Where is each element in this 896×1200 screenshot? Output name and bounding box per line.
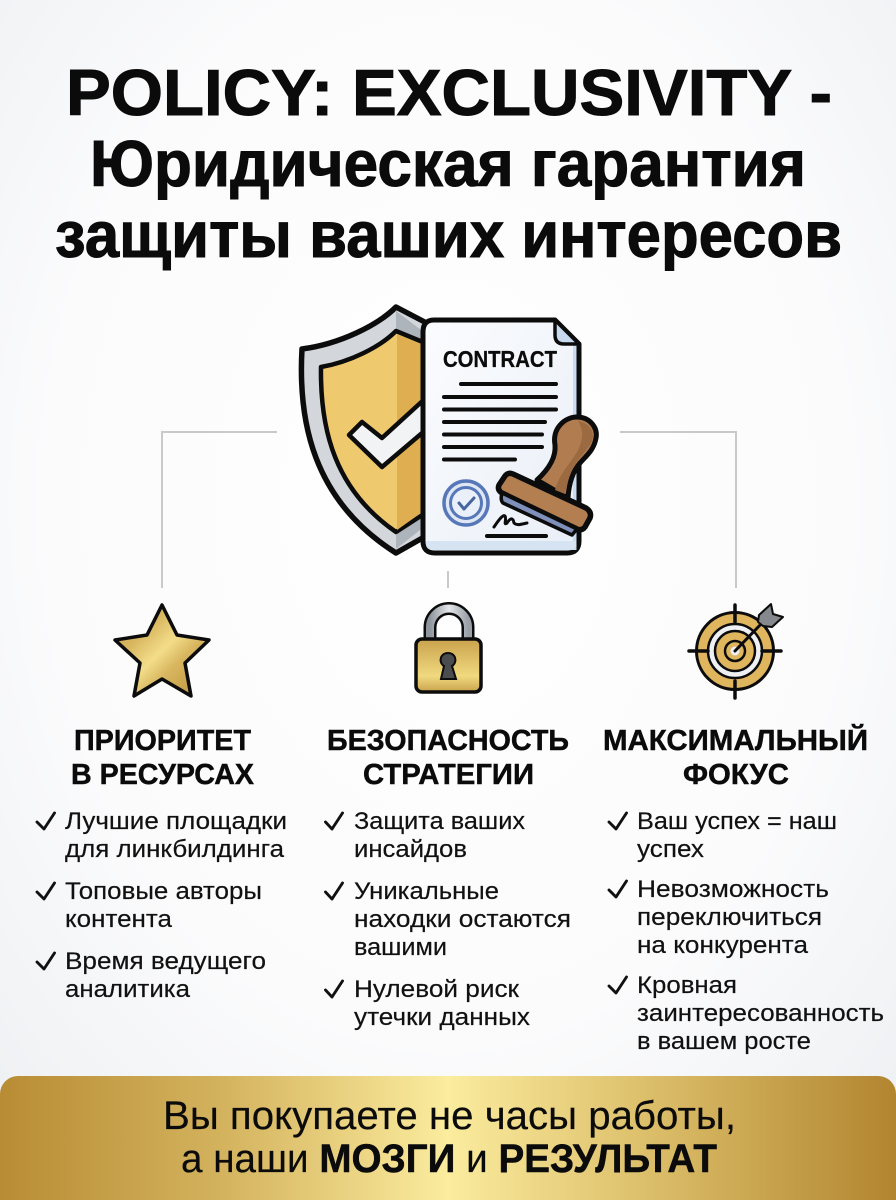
column: maximum focus [603, 723, 884, 1055]
list: вашими [354, 934, 447, 961]
list: аналитика [65, 976, 190, 1003]
title: Юридическая гарантия [90, 127, 806, 200]
list: Невозможность [637, 876, 829, 903]
list: заинтересованность [637, 1000, 884, 1027]
banner text [163, 1094, 736, 1181]
column heading: БЕЗОПАСНОСТЬ [327, 725, 569, 757]
title: POLICY: EXCLUSIVITY - [66, 56, 832, 129]
list: Ваш успех = наш [637, 808, 837, 835]
list: на конкурента [637, 932, 808, 959]
list [609, 808, 884, 1055]
list: Уникальные [354, 878, 499, 905]
icon: stamp [498, 417, 596, 535]
column heading: СТРАТЕГИИ [363, 759, 534, 791]
icon: shield with check [301, 307, 440, 553]
column heading [603, 723, 868, 791]
connector: right [620, 432, 736, 588]
connector: center [447, 571, 449, 588]
list: переключиться [637, 904, 822, 931]
icon: padlock [416, 609, 481, 692]
column heading: ПРИОРИТЕТ [74, 725, 251, 757]
list: инсайдов [354, 836, 467, 863]
list: Лучшие площадки [65, 808, 287, 835]
list: утечки данных [354, 1004, 530, 1031]
column heading: В РЕСУРСАХ [71, 759, 255, 791]
signature [494, 516, 527, 527]
column heading [327, 725, 569, 791]
title: защиты ваших интересов [55, 198, 842, 271]
icon: target with arrow [689, 604, 783, 698]
document text lines [444, 384, 556, 460]
list [326, 808, 571, 1031]
banner text: Вы покупаете не часы работы, [163, 1094, 736, 1138]
column: strategy security [326, 725, 571, 1031]
column: priority in resources [37, 725, 287, 1003]
list [37, 808, 287, 1003]
list: в вашем росте [637, 1028, 811, 1055]
list: Топовые авторы [65, 878, 262, 905]
icon: contract document [423, 320, 579, 553]
list: Защита ваших [354, 808, 525, 835]
banner [0, 1076, 896, 1200]
list: находки остаются [354, 906, 571, 933]
list: успех [637, 836, 704, 863]
seal [444, 481, 488, 525]
column heading [71, 725, 255, 791]
signature line [487, 534, 546, 538]
list: для линкбилдинга [65, 836, 284, 863]
list: Кровная [637, 972, 737, 999]
column heading: ФОКУС [683, 759, 789, 791]
list: контента [65, 906, 172, 933]
title [55, 56, 842, 271]
list: Нулевой риск [354, 976, 519, 1003]
list: Время ведущего [65, 948, 266, 975]
column heading: МАКСИМАЛЬНЫЙ [603, 723, 868, 757]
icon: star [115, 605, 209, 696]
document heading: CONTRACT [443, 346, 557, 372]
connector: left [162, 432, 277, 588]
banner text: а наши МОЗГИ и РЕЗУЛЬТАТ [181, 1137, 717, 1181]
